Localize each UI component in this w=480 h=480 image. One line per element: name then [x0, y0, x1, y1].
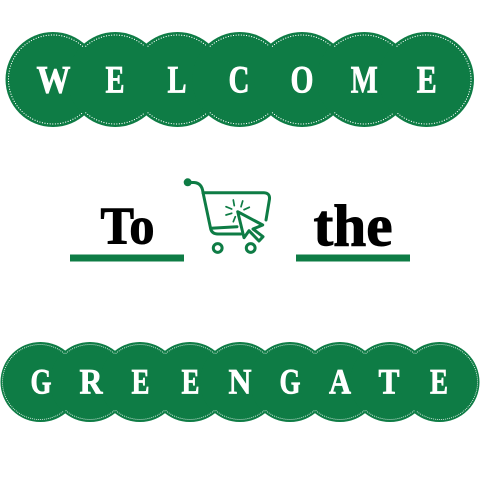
banner text: GREENGATE: N — [228, 362, 252, 402]
banner text: GREENGATE: E — [132, 362, 150, 402]
banner text: GREENGATE: E — [182, 362, 200, 402]
banner text: GREENGATE: T — [378, 362, 400, 402]
banner text: GREENGATE — [30, 362, 448, 402]
banner: GREENGATE — [0, 342, 480, 422]
banner text: WELCOME: E — [417, 59, 437, 102]
banner text: WELCOME — [36, 59, 437, 102]
banner text: WELCOME: M — [351, 59, 378, 102]
underline: To — [70, 254, 184, 262]
banner text: GREENGATE: R — [80, 362, 103, 402]
icon: shopping cart with cursor — [184, 178, 270, 252]
banner text: WELCOME: L — [168, 59, 186, 102]
banner text: WELCOME: W — [36, 59, 70, 102]
word: the: the — [314, 193, 392, 259]
banner text: GREENGATE: G — [30, 362, 52, 402]
banner: WELCOME — [6, 32, 474, 127]
scalloped green shape — [6, 32, 474, 127]
banner text: WELCOME: E — [106, 59, 124, 102]
banner text: WELCOME: O — [290, 59, 314, 102]
banner text: GREENGATE: A — [329, 362, 351, 402]
banner text: GREENGATE: E — [430, 362, 448, 402]
banner text: WELCOME: C — [228, 59, 250, 102]
banner text: GREENGATE: G — [280, 362, 300, 402]
scalloped green shape — [0, 342, 480, 422]
underline: the — [296, 254, 410, 262]
word: To: To — [100, 198, 154, 256]
